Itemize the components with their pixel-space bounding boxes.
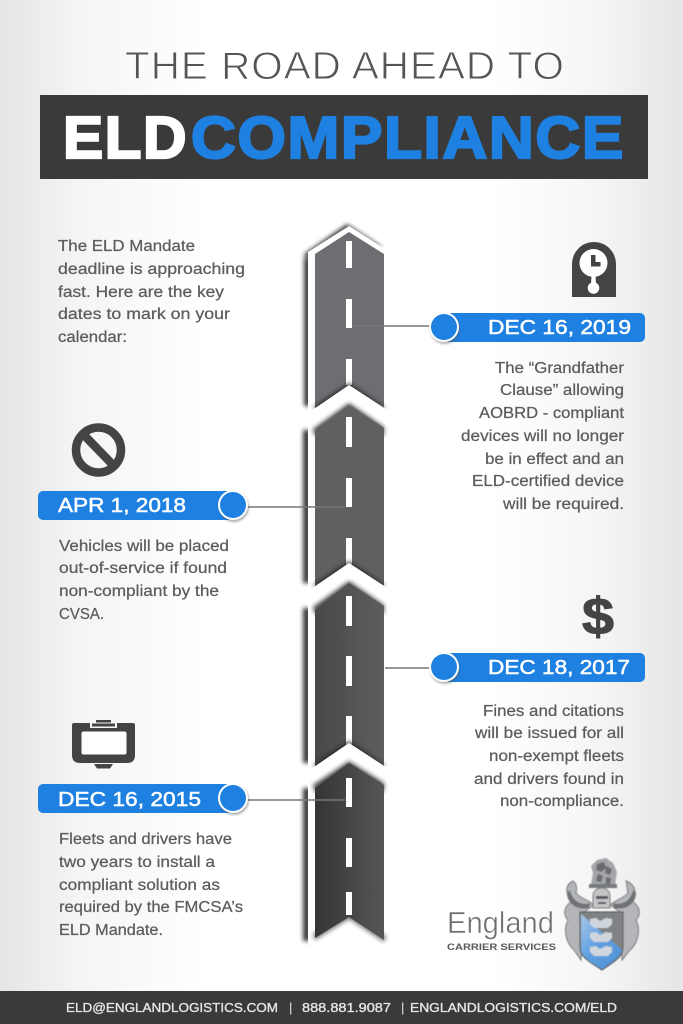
icon: prohibited sign bbox=[76, 428, 121, 472]
banner: COMPLIANCE bbox=[191, 105, 625, 171]
logo wordmark: England bbox=[447, 905, 554, 940]
description: ELD Mandate. bbox=[59, 922, 163, 939]
date pill: DEC 18, 2017 bbox=[488, 657, 630, 679]
description bbox=[59, 538, 229, 623]
description bbox=[461, 360, 625, 513]
icon: crest bbox=[565, 858, 639, 970]
logo: England Carrier Services bbox=[447, 858, 639, 970]
description: devices will no longer bbox=[461, 428, 624, 445]
description: required by the FMCSA’s bbox=[59, 899, 243, 916]
road segment 4 bbox=[303, 741, 392, 950]
description: two years to install a bbox=[59, 854, 215, 871]
description: will be issued for all bbox=[474, 725, 624, 742]
description: compliant solution as bbox=[59, 877, 220, 894]
description: will be required. bbox=[502, 496, 624, 513]
contact: phone: 888.881.9087 bbox=[302, 1000, 391, 1015]
banner: ELD bbox=[63, 105, 188, 171]
separator: | bbox=[289, 1000, 292, 1015]
connector line bbox=[246, 506, 345, 508]
date pill bbox=[38, 490, 249, 522]
intro text: deadline is approaching bbox=[58, 261, 245, 278]
separator: | bbox=[401, 1000, 404, 1015]
milestone: Dec 16, 2019 bbox=[352, 242, 645, 513]
icon: dollar sign: $ bbox=[582, 588, 614, 646]
description: non-compliant by the bbox=[59, 583, 219, 600]
title: THE ROAD AHEAD TO bbox=[125, 45, 565, 88]
connector line bbox=[352, 325, 432, 327]
description: non-exempt fleets bbox=[489, 748, 624, 765]
date pill bbox=[429, 312, 645, 344]
description bbox=[59, 831, 243, 939]
intro text: calendar: bbox=[58, 329, 127, 346]
description: non-compliance. bbox=[500, 793, 624, 810]
date pill: DEC 16, 2015 bbox=[58, 789, 201, 811]
description: be in effect and an bbox=[485, 451, 624, 468]
intro text: fast. Here are the key bbox=[58, 284, 224, 301]
banner bbox=[40, 95, 648, 179]
description: and drivers found in bbox=[474, 771, 624, 788]
road segment 2 bbox=[303, 383, 392, 590]
description bbox=[474, 703, 624, 810]
description: Fleets and drivers have bbox=[59, 831, 232, 848]
date pill: APR 1, 2018 bbox=[58, 495, 186, 517]
description: ELD-certified device bbox=[472, 473, 624, 490]
connector line bbox=[246, 799, 345, 801]
logo tagline: CARRIER SERVICES bbox=[447, 942, 556, 952]
contact: website: ENGLANDLOGISTICS.COM/ELD bbox=[410, 1000, 617, 1015]
road timeline bbox=[303, 224, 392, 950]
description: Clause” allowing bbox=[500, 382, 624, 399]
connector line bbox=[385, 667, 432, 669]
icon: ELD device bbox=[72, 720, 135, 768]
road segment 3 bbox=[303, 561, 392, 770]
description: Vehicles will be placed bbox=[59, 538, 229, 555]
icon: pendulum clock bbox=[572, 242, 616, 297]
date pill: DEC 16, 2019 bbox=[488, 317, 631, 339]
intro text bbox=[58, 238, 245, 346]
date pill bbox=[429, 652, 645, 684]
intro text: The ELD Mandate bbox=[58, 238, 195, 255]
milestone: Dec 18, 2017 bbox=[385, 588, 645, 810]
footer bar bbox=[0, 991, 683, 1024]
contact: email: ELD@ENGLANDLOGISTICS.COM bbox=[66, 1000, 278, 1015]
road segment 1 bbox=[304, 224, 390, 412]
date pill bbox=[38, 783, 249, 815]
intro text: dates to mark on your bbox=[58, 306, 230, 323]
milestone: Dec 16, 2015 bbox=[38, 720, 345, 939]
description: out-of-service if found bbox=[59, 560, 227, 577]
description: Fines and citations bbox=[483, 703, 624, 720]
description: CVSA. bbox=[59, 606, 104, 623]
milestone: Apr 1, 2018 bbox=[38, 428, 345, 623]
description: The “Grandfather bbox=[495, 360, 624, 377]
description: AOBRD - compliant bbox=[479, 405, 625, 422]
